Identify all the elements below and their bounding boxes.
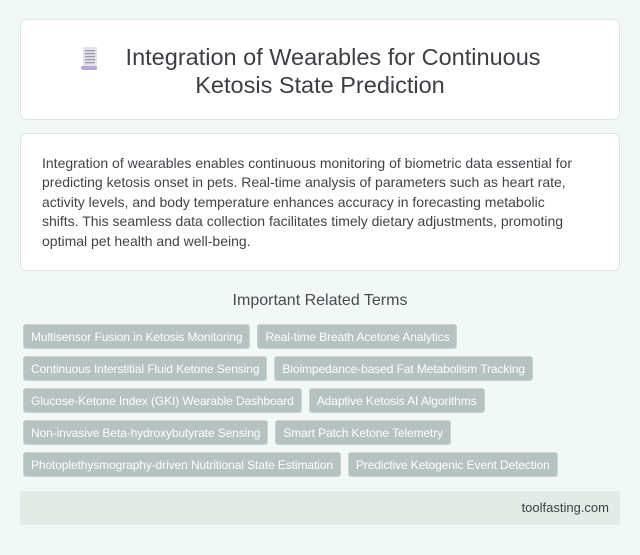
icon: document bbox=[81, 47, 97, 70]
tags list: Smart Patch Ketone Telemetry bbox=[283, 426, 443, 440]
header panel bbox=[20, 19, 620, 120]
tags list: Real-time Breath Acetone Analytics bbox=[265, 330, 449, 344]
tags list: Predictive Ketogenic Event Detection bbox=[356, 458, 550, 472]
description text: Integration of wearables enables continuous monitoring of biometric data essential for bbox=[42, 155, 572, 171]
tags list bbox=[23, 324, 558, 477]
title: Ketosis State Prediction bbox=[195, 72, 445, 98]
footer: toolfasting.com bbox=[522, 500, 609, 515]
description text bbox=[42, 155, 572, 249]
tags list: Multisensor Fusion in Ketosis Monitoring bbox=[31, 330, 242, 344]
description text: activity levels, and body temperature enhances accuracy in forecasting metabolic bbox=[42, 194, 545, 210]
tags list: Photoplethysmography-driven Nutritional State Estimation bbox=[31, 458, 333, 472]
footer bbox=[20, 491, 620, 525]
tags list: Bioimpedance-based Fat Metabolism Tracking bbox=[282, 362, 525, 376]
description text: predicting ketosis onset in pets. Real-time analysis of parameters such as heart rate, bbox=[42, 174, 566, 190]
tags list: Adaptive Ketosis AI Algorithms bbox=[317, 394, 477, 408]
tags list: Glucose-Ketone Index (GKI) Wearable Dashboard bbox=[31, 394, 294, 408]
subheading: Important Related Terms bbox=[233, 292, 407, 309]
tags list: Non-invasive Beta-hydroxybutyrate Sensing bbox=[31, 426, 260, 440]
description text: optimal pet health and well-being. bbox=[42, 233, 251, 249]
title: Integration of Wearables for Continuous bbox=[126, 44, 541, 70]
description panel bbox=[20, 133, 620, 271]
title bbox=[126, 44, 541, 98]
description text: shifts. This seamless data collection facilitates timely dietary adjustments, promoting bbox=[42, 213, 563, 229]
tags list: Continuous Interstitial Fluid Ketone Sensing bbox=[31, 362, 259, 376]
